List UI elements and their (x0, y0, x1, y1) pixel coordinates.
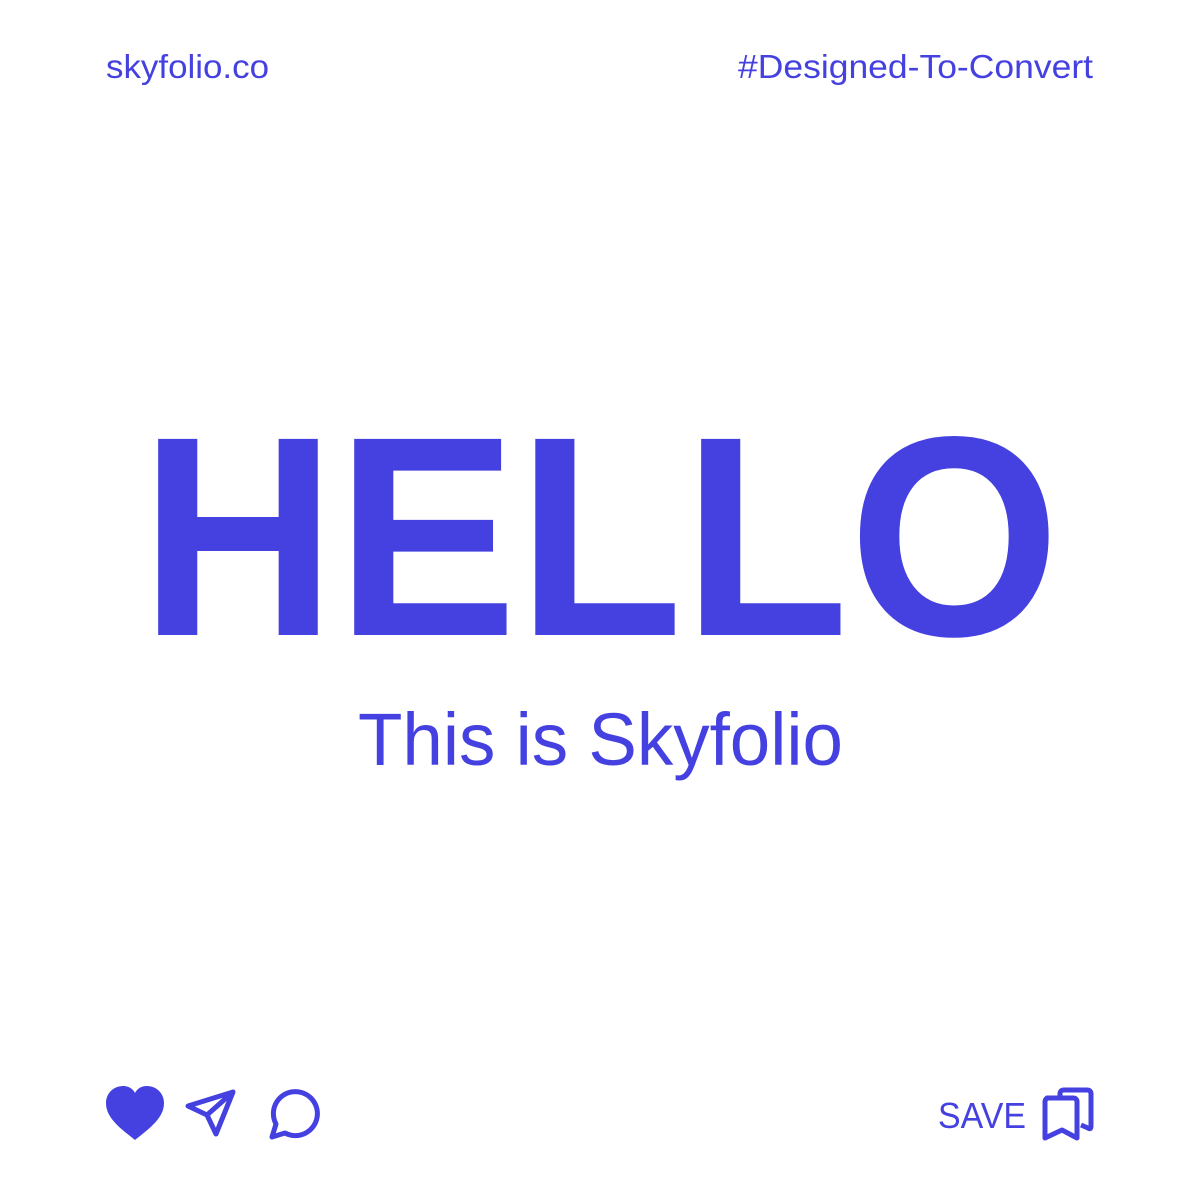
icon: heart (106, 1086, 164, 1140)
icon: comment bubble (272, 1092, 317, 1137)
save label: SAVE (938, 1095, 1026, 1136)
header: site url: skyfolio.co (106, 48, 269, 85)
icon: paper plane (188, 1092, 233, 1134)
header: hashtag: #Designed-To-Convert (738, 48, 1093, 85)
icon: bookmarks (1045, 1090, 1091, 1138)
subtitle: This is Skyfolio (358, 698, 843, 781)
title: HELLO: HELLO (140, 378, 1060, 696)
